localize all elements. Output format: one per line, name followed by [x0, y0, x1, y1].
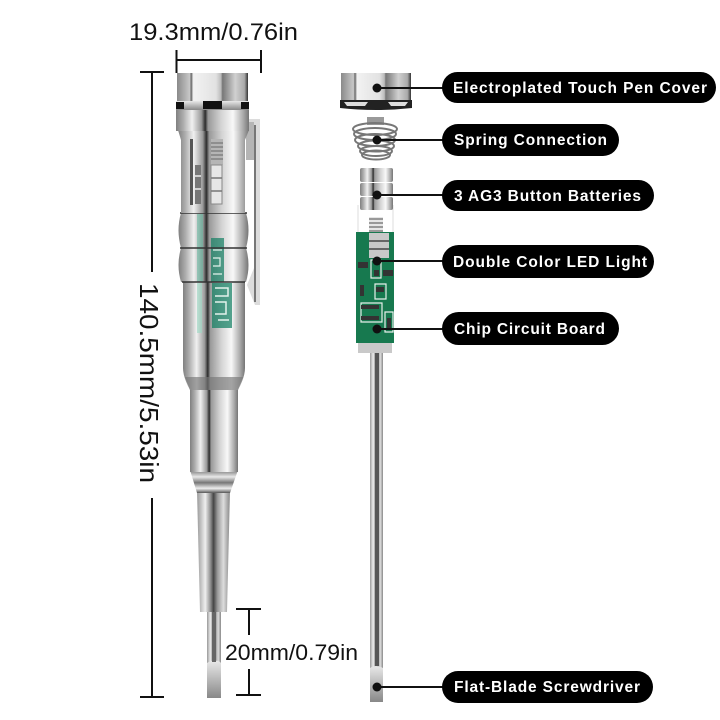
- batteries: [360, 168, 393, 210]
- label: Flat-Blade Screwdriver: [442, 671, 653, 703]
- label: Chip Circuit Board: Chip Circuit Board: [454, 321, 605, 338]
- label: 3 AG3 Button Batteries: 3 AG3 Button Batteries: [454, 188, 641, 205]
- rod and blade: [370, 352, 383, 702]
- grip bulges: [178, 213, 248, 282]
- circuit board: [356, 232, 394, 353]
- label: Chip Circuit Board: [442, 312, 619, 345]
- knurled cap: [177, 73, 248, 101]
- dimension: width 19.3mm: 19.3mm/0.76in: [129, 19, 298, 46]
- label: Flat-Blade Screwdriver: Flat-Blade Screwdriver: [454, 679, 640, 696]
- guide lines: [358, 205, 393, 232]
- dimension: width 19.3mm: [129, 19, 298, 73]
- dimension: blade 20mm: [225, 609, 358, 695]
- pocket clip: [246, 119, 260, 305]
- dimension: length 140.5mm: 140.5mm/5.53in: [134, 283, 164, 483]
- upper barrel: [178, 130, 249, 213]
- assembled test pen: [176, 73, 260, 698]
- label: Spring Connection: Spring Connection: [454, 132, 607, 149]
- label: Spring Connection: [442, 124, 619, 156]
- label: Electroplated Touch Pen Cover: [442, 72, 716, 103]
- small spring: [369, 219, 383, 235]
- dimension: length 140.5mm: [134, 72, 164, 697]
- exploded components: [340, 73, 445, 702]
- dimension: blade 20mm: 20mm/0.79in: [225, 640, 358, 665]
- leader lines and dots: [372, 84, 445, 692]
- label: Double Color LED Light: Double Color LED Light: [453, 254, 647, 271]
- collar: [176, 109, 249, 131]
- lower barrel: [183, 282, 245, 390]
- label: Electroplated Touch Pen Cover: Electroplated Touch Pen Cover: [453, 80, 707, 97]
- black band: [176, 101, 249, 110]
- pen shaft and tip: [190, 385, 238, 698]
- label: Double Color LED Light: [442, 245, 654, 278]
- label: 3 AG3 Button Batteries: [442, 180, 654, 211]
- spring: [353, 117, 397, 160]
- exploded cap: [340, 73, 412, 110]
